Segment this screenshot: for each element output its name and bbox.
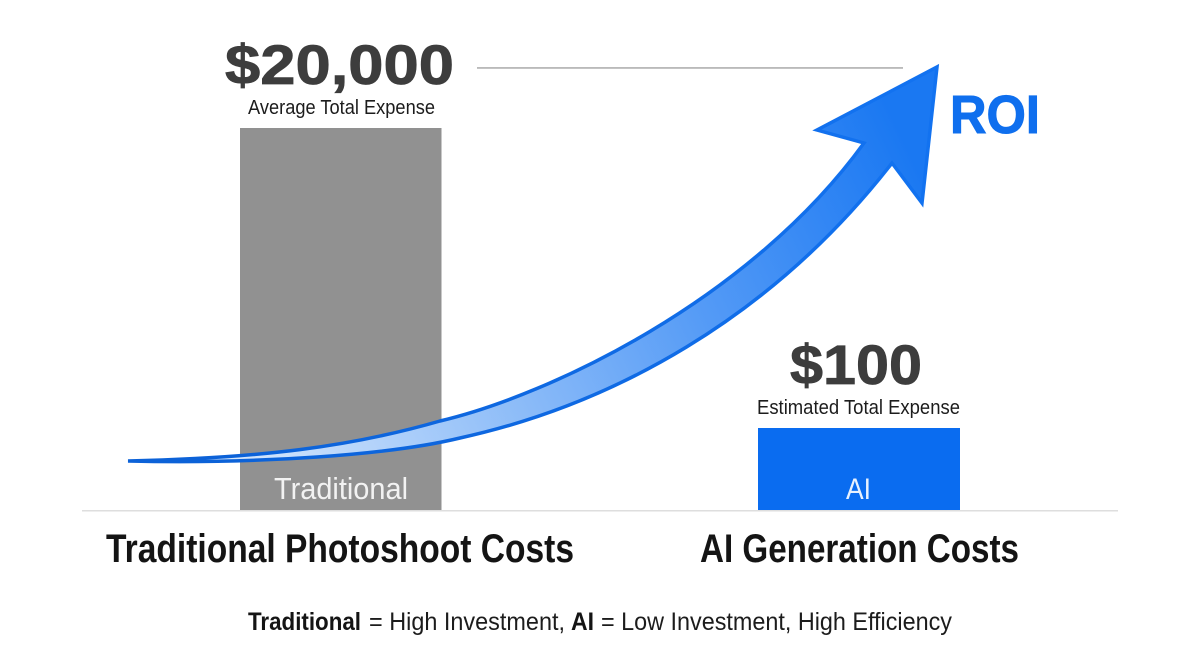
category heading: traditional photoshoot costs: Traditional Photoshoot Costs	[106, 527, 574, 571]
footer summary: = High Investment,	[369, 608, 565, 636]
reference line to arrow tip	[477, 67, 903, 69]
baseline axis	[82, 510, 1118, 512]
arrow: ROI growth	[128, 67, 937, 462]
value: $100	[757, 333, 960, 419]
value: $20,000	[225, 33, 454, 119]
value: $20,000: $20,000	[225, 33, 454, 96]
footer summary: AI	[571, 608, 594, 636]
bar label: traditional: Traditional	[274, 471, 408, 506]
footer summary: Traditional	[248, 608, 361, 636]
bar: AI	[758, 428, 960, 510]
caption: estimated total expense: Estimated Total Expense	[757, 397, 960, 419]
value: $100: $100	[790, 333, 922, 396]
footer summary: = Low Investment, High Efficiency	[601, 608, 952, 636]
category heading: AI generation costs: AI Generation Costs	[700, 527, 1019, 571]
bar: traditional	[240, 128, 442, 510]
footer summary	[248, 608, 952, 636]
bar label: AI: AI	[846, 473, 871, 506]
caption: average total expense: Average Total Expense	[248, 97, 435, 119]
label: ROI: ROI	[950, 85, 1040, 145]
